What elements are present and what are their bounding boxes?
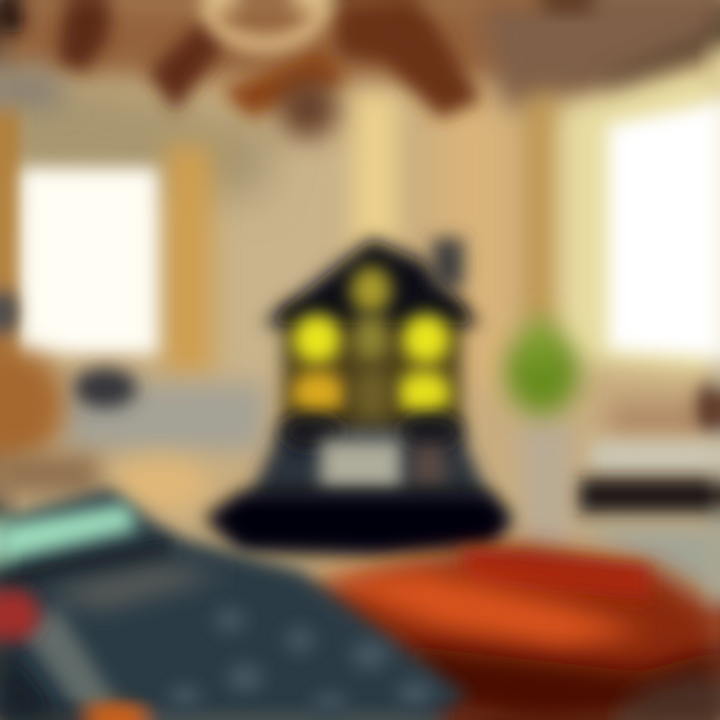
left sofa and round object	[0, 290, 265, 511]
left edge colour correction	[0, 0, 24, 720]
house chimney	[432, 238, 464, 288]
house body	[283, 305, 461, 435]
calculator	[0, 488, 468, 720]
calculator side keys	[18, 608, 118, 720]
calculator upper key row	[40, 565, 225, 608]
right furniture	[570, 382, 720, 600]
calculator left edge	[0, 640, 60, 720]
icon: house lit windows	[291, 266, 451, 423]
calculator dark band under display	[0, 535, 172, 592]
house roof	[262, 238, 480, 325]
right window	[526, 60, 720, 375]
house base	[204, 492, 516, 556]
calculator keys	[170, 608, 432, 718]
red key	[0, 589, 40, 641]
left window	[0, 110, 211, 375]
top edge colour correction	[0, 0, 720, 18]
bottom edge colour correction	[0, 698, 720, 720]
house figure	[204, 238, 516, 556]
calculator display	[0, 503, 138, 562]
icon: green plant	[506, 316, 578, 414]
icon: ceiling light ring	[209, 0, 321, 44]
right edge colour correction	[700, 0, 720, 720]
house lower floor	[245, 428, 492, 505]
calculator body	[0, 488, 468, 720]
ceiling with wooden beams	[0, 0, 720, 200]
glass vase	[520, 420, 572, 560]
orange cushion	[296, 545, 720, 720]
orange key	[83, 704, 147, 720]
